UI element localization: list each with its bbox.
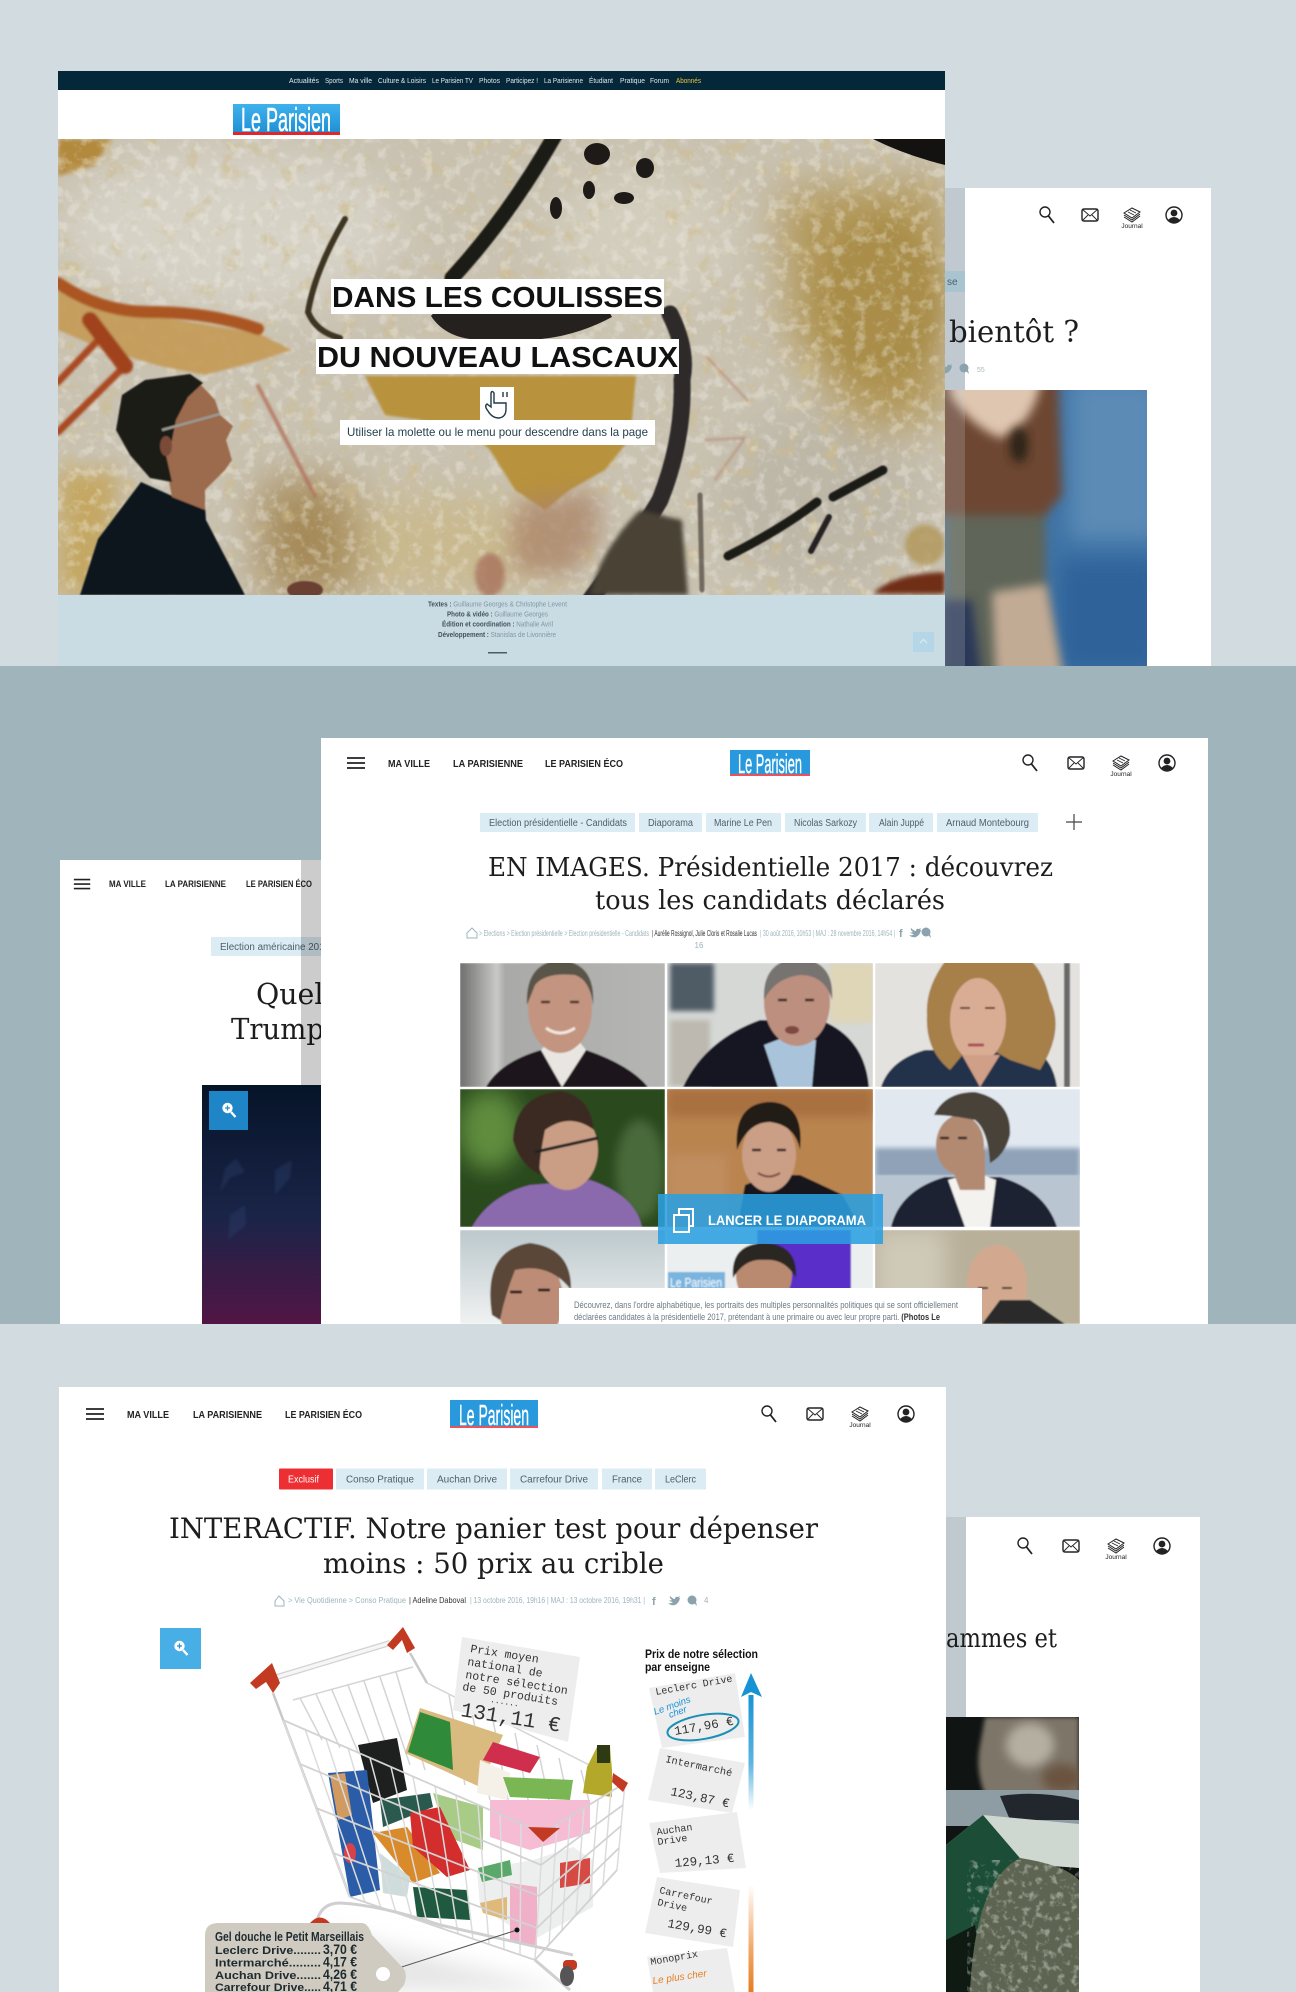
icon: account bbox=[1154, 1538, 1170, 1554]
price note: Leclerc Drive: Leclerc Drive bbox=[655, 1674, 734, 1699]
headline bbox=[488, 853, 1053, 916]
photo: Lascaux cave wall with visitor bbox=[58, 130, 945, 600]
portrait: man with dark hair bbox=[460, 1230, 665, 1324]
top navigation bar: Culture & Loisirs bbox=[378, 78, 426, 85]
price note: national average: de 50 produits bbox=[461, 1681, 559, 1709]
icon: journal: Journal bbox=[849, 1422, 871, 1429]
slideshow intro text: déclarées candidates à la présidentielle 2017, prétendant à une primaire ou avec leur propre parti. (Photos Le bbox=[574, 1312, 940, 1322]
panel: Lascaux long-format page bbox=[58, 71, 945, 666]
credits footer: Édition et coordination : Nathalie Avril bbox=[442, 620, 553, 628]
topic tags: France bbox=[612, 1474, 642, 1486]
black cave strokes bbox=[308, 130, 883, 600]
topic tags: Carrefour Drive bbox=[520, 1474, 588, 1486]
panel shadow strip bbox=[301, 860, 321, 1085]
panel: background article with fire photo bbox=[946, 1517, 1200, 1992]
top navigation bar bbox=[58, 71, 945, 90]
icon: mail bbox=[1082, 209, 1098, 221]
arrow: most expensive direction bbox=[748, 1885, 754, 1992]
cart back wires bbox=[293, 1667, 625, 1820]
visitor bbox=[80, 374, 323, 599]
topic tags bbox=[279, 1468, 706, 1490]
button: launch slideshow bbox=[658, 1194, 883, 1244]
red corner guards bbox=[528, 1827, 560, 1842]
icon: scroll hand bbox=[480, 387, 514, 420]
icon: journal bbox=[849, 1407, 871, 1429]
article metadata: | Aurélie Rossignol, Julie Cloris et Rosalie Lucas bbox=[652, 929, 757, 938]
headline fragment: Quels bbox=[256, 977, 338, 1011]
navigation links: LA PARISIENNE bbox=[453, 759, 523, 770]
photo: blurred woman bbox=[945, 390, 1147, 666]
price note: national average: Prix moyen bbox=[469, 1643, 540, 1667]
icon: menu bbox=[74, 880, 90, 889]
tag: Election américaine 2016 bbox=[220, 942, 330, 953]
logo: Le Parisien: Le Parisien bbox=[241, 101, 331, 138]
logo: Le Parisien: Le Parisien bbox=[459, 1400, 529, 1432]
price note: national average: ...... bbox=[490, 1696, 519, 1709]
hero instruction: Utiliser la molette ou le menu pour descendre dans la page bbox=[347, 425, 648, 439]
topic tags: Conso Pratique bbox=[346, 1474, 414, 1486]
topic tags: Auchan Drive bbox=[437, 1474, 497, 1486]
image: dark starry flag bbox=[202, 1085, 321, 1324]
ochre bison bbox=[365, 376, 636, 510]
price label: shower gel comparison: Gel douche le Petit Marseillais bbox=[215, 1930, 364, 1944]
illustration: shopping cart bbox=[250, 1627, 628, 1992]
portrait: woman with wavy blonde hair bbox=[875, 950, 1080, 1087]
topic tags: Exclusif bbox=[288, 1474, 319, 1486]
back navigation: LE PARISIEN ÉCO bbox=[246, 879, 312, 889]
back navigation bbox=[109, 879, 312, 889]
navigation links bbox=[388, 757, 623, 770]
headline bbox=[169, 1512, 819, 1580]
price note: Carrefour Drive bbox=[645, 1877, 740, 1947]
price label: shower gel comparison: Leclerc Drive........ bbox=[215, 1945, 321, 1957]
price note: Monoprix: Le plus cher bbox=[652, 1968, 708, 1987]
price ranking heading bbox=[645, 1647, 758, 1674]
top navigation bar: Abonnés bbox=[676, 78, 701, 85]
hero title: DANS LES COULISSES bbox=[332, 282, 663, 314]
panel: background article with blurred portrait bbox=[935, 188, 1211, 680]
hero title: DU NOUVEAU LASCAUX bbox=[317, 342, 679, 374]
portrait: man with Le Parisien backdrop bbox=[667, 1230, 873, 1288]
logo: Le Parisien bbox=[730, 749, 810, 779]
price note: Leclerc Drive: 117,96 € bbox=[673, 1715, 735, 1739]
article metadata: | Adeline Daboval bbox=[409, 1596, 466, 1605]
zoom button bbox=[160, 1628, 201, 1669]
price note: Monoprix: Monoprix bbox=[650, 1949, 699, 1969]
rust patches bbox=[475, 525, 945, 597]
top navigation bar: Actualités bbox=[289, 78, 319, 85]
panel shadow strip bbox=[945, 188, 965, 390]
icon: journal bbox=[1110, 756, 1132, 778]
tag string bbox=[383, 1930, 517, 1973]
navigation links: LE PARISIEN ÉCO bbox=[545, 757, 623, 770]
topic tags: Election présidentielle - Candidats bbox=[489, 818, 627, 829]
back-to-top button bbox=[913, 632, 934, 652]
logo: Le Parisien bbox=[450, 1400, 538, 1428]
article metadata: > Elections > Election présidentielle > Election présidentielle - Candidats bbox=[479, 929, 649, 938]
icon: account bbox=[1159, 755, 1175, 771]
icon: more tags bbox=[1066, 814, 1082, 830]
price label: shower gel comparison bbox=[205, 1923, 406, 1992]
icon: mail bbox=[807, 1408, 823, 1420]
cart handle bbox=[250, 1627, 427, 1897]
zoom button bbox=[209, 1091, 248, 1130]
photo grid: candidates bbox=[458, 950, 1080, 1345]
credits footer: Photo & vidéo : Guillaume Georges bbox=[447, 612, 548, 618]
logo: Le Parisien: Le Parisien bbox=[738, 749, 802, 779]
price note: Intermarché bbox=[648, 1748, 745, 1813]
portrait: man with grey hair bbox=[667, 958, 873, 1087]
topic tags bbox=[480, 813, 1038, 832]
top navigation bar: Étudiant bbox=[589, 76, 613, 85]
icon: account bbox=[898, 1406, 914, 1422]
top navigation bar: Le Parisien TV bbox=[432, 78, 473, 85]
price note: Auchan Drive bbox=[649, 1812, 746, 1873]
price note: Leclerc Drive: Le moins bbox=[652, 1694, 692, 1718]
panel shadow strip bbox=[946, 1517, 966, 1717]
tag fragment: se bbox=[947, 277, 958, 288]
headline fragment bbox=[231, 982, 321, 1045]
price note: national average: national de bbox=[466, 1656, 543, 1681]
article metadata: f bbox=[899, 928, 903, 940]
panel: candidates slideshow article bbox=[321, 738, 1208, 1345]
price note: Leclerc Drive: cher bbox=[667, 1704, 689, 1721]
headline: INTERACTIF. Notre panier test pour dépenser bbox=[169, 1512, 819, 1545]
price label: shower gel comparison: Auchan Drive....... bbox=[215, 1970, 321, 1982]
slideshow intro text bbox=[559, 1288, 982, 1324]
price note: national average: notre sélection bbox=[464, 1669, 569, 1698]
price note: Auchan Drive: Auchan bbox=[656, 1822, 693, 1839]
icon: search bbox=[1040, 207, 1054, 223]
topic tags: LeClerc bbox=[665, 1474, 696, 1486]
icon: mail bbox=[1063, 1540, 1079, 1552]
navigation links: MA VILLE bbox=[127, 1410, 169, 1421]
portrait: man with curly hair bbox=[875, 1089, 1080, 1227]
icon: mail bbox=[1068, 757, 1084, 769]
icon: menu bbox=[347, 758, 365, 768]
top navigation bar: Ma ville bbox=[349, 78, 372, 85]
price note: Intermarché: Intermarché bbox=[664, 1754, 733, 1780]
portrait: man in dark jacket bbox=[460, 960, 665, 1087]
tag fragment bbox=[945, 271, 965, 292]
arrow: cheapest direction bbox=[741, 1673, 762, 1810]
headline fragment: bientôt ? bbox=[949, 315, 1079, 350]
price note: Leclerc Drive bbox=[649, 1673, 745, 1748]
article metadata: | 13 octobre 2016, 19h16 | MAJ : 13 octobre 2016, 19h31 | bbox=[470, 1596, 645, 1605]
photo: fire and greenhouse bbox=[946, 1717, 1082, 1992]
article metadata: > Vie Quotidienne > Conso Pratique bbox=[288, 1596, 406, 1605]
navigation links: LE PARISIEN ÉCO bbox=[285, 1408, 362, 1421]
price ranking heading: Prix de notre sélection bbox=[645, 1647, 758, 1661]
price note: national average: 131,11 € bbox=[459, 1700, 562, 1739]
price label: shower gel comparison: 4,17 € bbox=[323, 1954, 357, 1970]
groceries bbox=[328, 1708, 612, 1947]
price label: shower gel comparison: Intermarché......... bbox=[215, 1958, 321, 1970]
article metadata: 16 bbox=[695, 941, 704, 950]
icon: journal bbox=[1121, 208, 1143, 230]
price note: Carrefour Drive: 129,99 € bbox=[666, 1917, 728, 1941]
headline fragment: Trump bbox=[231, 1012, 324, 1046]
top navigation bar: Pratique bbox=[620, 78, 645, 85]
price note: national average bbox=[453, 1637, 580, 1742]
price note: Intermarché: 123,87 € bbox=[669, 1785, 731, 1811]
headline: tous les candidats déclarés bbox=[595, 886, 945, 916]
icon: search bbox=[1018, 1538, 1032, 1554]
price note: Auchan Drive: Drive bbox=[657, 1833, 688, 1849]
red horse bbox=[58, 283, 748, 496]
top navigation bar: La Parisienne bbox=[544, 78, 583, 85]
cart front wires bbox=[283, 1720, 625, 1960]
headline: EN IMAGES. Présidentielle 2017 : découvrez bbox=[488, 853, 1053, 883]
icon: search bbox=[1023, 755, 1037, 771]
credits footer: Développement : Stanislas de Livonnière bbox=[438, 632, 556, 639]
social icons fragment bbox=[940, 364, 985, 374]
hero instruction bbox=[340, 420, 655, 445]
article metadata: f bbox=[652, 1596, 656, 1608]
navigation links bbox=[128, 1409, 362, 1418]
icon: journal: Journal bbox=[1110, 771, 1132, 778]
price note: Carrefour Drive: Carrefour bbox=[658, 1885, 713, 1908]
hero title bbox=[316, 279, 679, 374]
price label: shower gel comparison: 4,26 € bbox=[323, 1967, 357, 1982]
back navigation: MA VILLE bbox=[109, 879, 146, 889]
logo: Le Parisien bbox=[233, 101, 340, 138]
button: launch slideshow: LANCER LE DIAPORAMA bbox=[708, 1212, 866, 1228]
icon: journal: Journal bbox=[1105, 1554, 1127, 1561]
icon: menu bbox=[86, 1409, 104, 1419]
headline fragment: ammes et bbox=[946, 1624, 1057, 1654]
topic tags: Diaporama bbox=[648, 818, 693, 829]
top navigation bar: Participez ! bbox=[506, 78, 538, 85]
icon: journal bbox=[1105, 1539, 1127, 1561]
price ranking heading: par enseigne bbox=[645, 1660, 710, 1674]
topic tags: Nicolas Sarkozy bbox=[794, 818, 857, 829]
panel: shopping basket interactive article bbox=[59, 1387, 946, 1992]
icon: search bbox=[762, 1406, 776, 1422]
price note: Auchan Drive: 129,13 € bbox=[674, 1852, 735, 1871]
portrait: woman with glasses bbox=[458, 1089, 665, 1227]
cart shadow bbox=[300, 1930, 570, 1992]
stone tones bbox=[58, 139, 945, 595]
navigation links: LA PARISIENNE bbox=[193, 1410, 262, 1421]
cart base and wheels bbox=[317, 1903, 573, 1990]
headline: moins : 50 prix au crible bbox=[323, 1547, 664, 1580]
top navigation bar: Forum bbox=[650, 78, 669, 85]
icon: journal: Journal bbox=[1121, 223, 1143, 230]
article metadata: | 30 août 2016, 10h53 | MAJ : 28 novembre 2016, 14h54 | bbox=[760, 929, 895, 938]
top navigation bar: Photos bbox=[479, 78, 500, 85]
navigation links: MA VILLE bbox=[388, 759, 430, 770]
article metadata bbox=[275, 1596, 709, 1608]
back navigation: LA PARISIENNE bbox=[165, 879, 226, 889]
price note: Carrefour Drive: Drive bbox=[656, 1897, 688, 1915]
topic tags: Arnaud Montebourg bbox=[946, 818, 1029, 829]
social icons fragment: 55 bbox=[977, 367, 985, 374]
topic tags: Alain Juppé bbox=[879, 818, 924, 829]
price note: Monoprix bbox=[647, 1948, 735, 1992]
icon: account bbox=[1166, 207, 1182, 223]
credits footer bbox=[58, 595, 945, 666]
topic tags: Marine Le Pen bbox=[714, 818, 772, 829]
portrait: smiling man on wood bbox=[667, 1089, 873, 1227]
credits footer: Textes : Guillaume Georges & Christophe Levent bbox=[428, 602, 567, 608]
slideshow intro text: Découvrez, dans l'ordre alphabétique, les portraits des multiples personnalités politiques qui se sont officiellement bbox=[574, 1300, 958, 1310]
tag bbox=[211, 937, 331, 956]
top navigation bar: Sports bbox=[325, 78, 343, 85]
portrait: man with Le Parisien backdrop: Le Parisien bbox=[670, 1275, 722, 1290]
price label: shower gel comparison: 3,70 € bbox=[323, 1942, 357, 1957]
portrait: bald man bbox=[875, 1230, 1080, 1325]
article metadata bbox=[467, 928, 931, 950]
panel: background article Trump bbox=[60, 860, 338, 1324]
article metadata: 4 bbox=[704, 1596, 709, 1605]
